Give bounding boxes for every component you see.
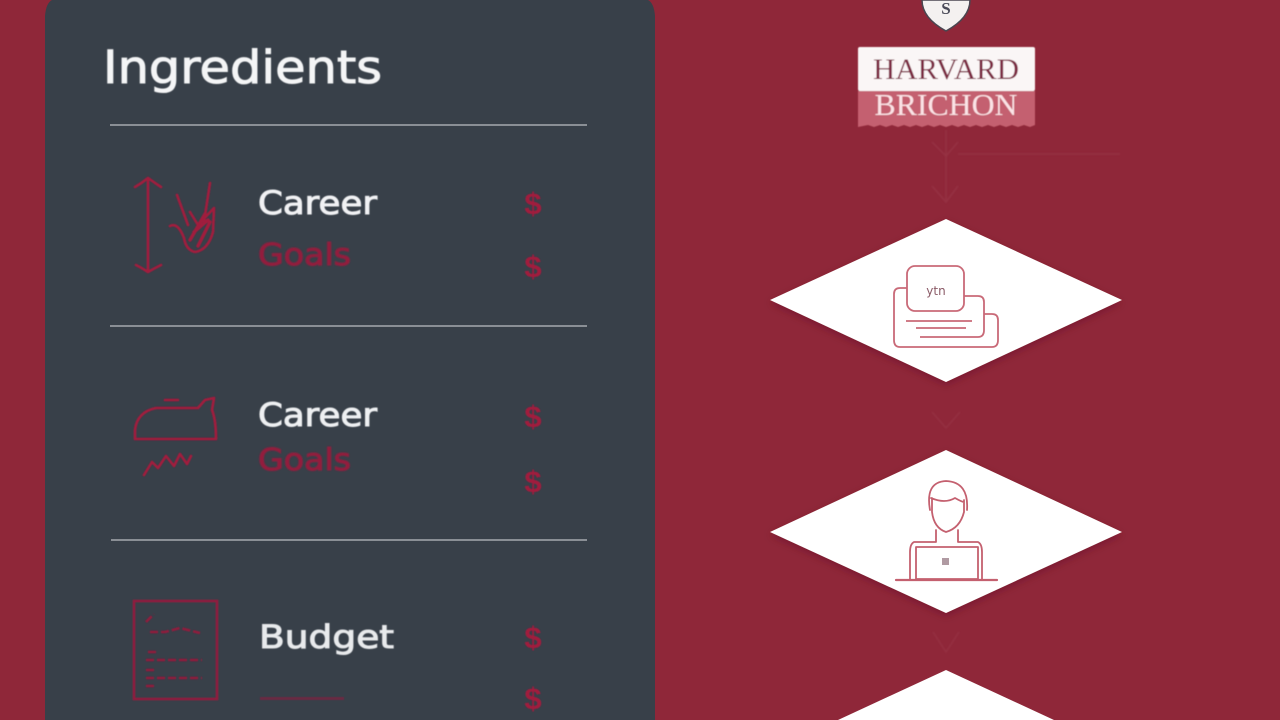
label: Goals: Goals (258, 443, 351, 478)
dollar signs: $ (524, 186, 542, 221)
dollar signs: $ (524, 249, 542, 284)
diamond 1 (770, 219, 1122, 382)
dollar signs (524, 399, 542, 499)
icon label: ytn (926, 284, 946, 298)
dollar signs: $ (524, 681, 542, 716)
faint connector arrow 3 (933, 632, 959, 652)
diamond 2 (770, 450, 1122, 613)
dollar signs: $ (524, 464, 542, 499)
dollar signs: $ (524, 399, 542, 434)
icon: cloud and wave (135, 398, 216, 475)
icon: arrow and hand (135, 178, 214, 272)
label: Career: Career (258, 184, 378, 222)
icon: stacked screens (894, 266, 998, 347)
icon: person at laptop (896, 481, 997, 580)
row: career goals 2 (135, 396, 542, 499)
crest shield (922, 0, 970, 31)
panel: ingredients (45, 0, 655, 720)
heading: Ingredients: Ingredients (103, 41, 382, 94)
harvard logo: BRICHON (874, 87, 1018, 122)
icon: checklist (134, 601, 217, 699)
label: Goals: Goals (258, 238, 351, 273)
icon: laptop logo (942, 558, 949, 565)
label: Career: Career (258, 396, 378, 434)
dollar signs (524, 186, 542, 284)
diamond 3 (838, 670, 1054, 720)
row: career goals 1 (135, 178, 542, 284)
faint connector arrow 2 (932, 412, 960, 428)
harvard logo: HARVARD (873, 53, 1019, 86)
dollar signs (524, 620, 542, 716)
faint label line (260, 697, 344, 700)
label: Budget: Budget (259, 618, 394, 656)
harvard logo (858, 47, 1035, 127)
faint connector arrow 1 (932, 130, 1120, 202)
dollar signs: $ (524, 620, 542, 655)
row: budget (134, 601, 542, 716)
